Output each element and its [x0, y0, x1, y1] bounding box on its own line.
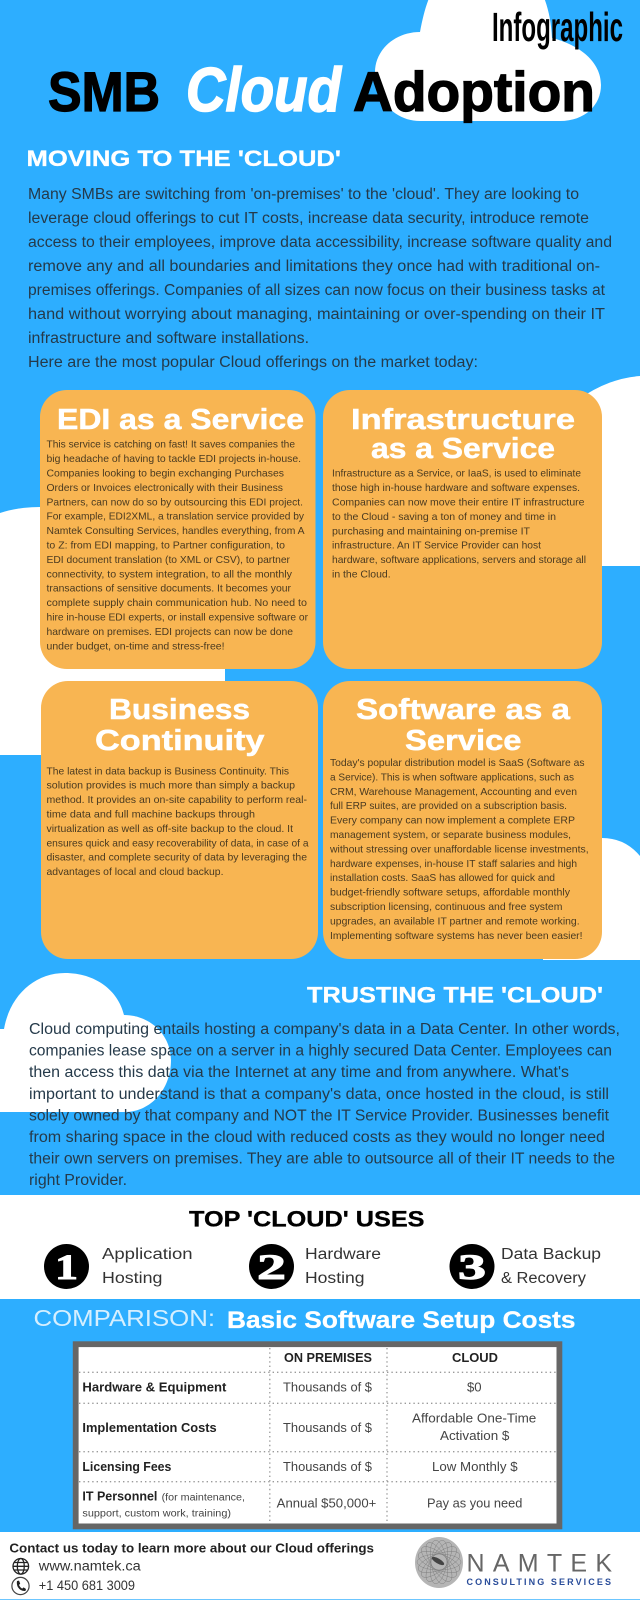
card body: Software as a Service: without stressing over unaffordable license investments, — [329, 844, 589, 855]
row: IT personnel: Pay as you need — [427, 1495, 522, 1510]
table header row: CLOUD — [452, 1350, 498, 1365]
card body: Infrastructure: to the Cloud - saving a ton of money and time in — [332, 512, 556, 523]
title: Cloud — [186, 56, 342, 125]
trust text block: their own servers on premises. They are able to outsource all of their IT needs to the — [29, 1151, 615, 1168]
row: hardware and equipment: Thousands of $ — [283, 1380, 373, 1395]
card body: EDI: For example, EDI2XML, a translation service provided by — [46, 512, 305, 523]
row: implementation costs: Activation $ — [440, 1428, 510, 1443]
card body: Business Continuity: solution provides is much more than simply a backup — [46, 781, 295, 792]
title — [48, 56, 595, 125]
phone number: +1 450 681 3009 — [39, 1578, 135, 1593]
trust text block: solely owned by that company and NOT the IT Service Provider. Businesses benefit — [29, 1107, 610, 1124]
card body: Business Continuity: time data and full machine backups through — [46, 810, 255, 820]
card body: Software as a Service: subscription licensing, continuous and free system — [330, 902, 562, 913]
card body: EDI — [46, 440, 309, 652]
row: hardware and equipment: $0 — [467, 1380, 482, 1395]
logo spiral mark — [415, 1537, 463, 1588]
card body: Software as a Service: hardware expenses, in-house IT staff salaries and high — [330, 859, 577, 870]
logo wordmark: NAMTEK — [466, 1550, 612, 1578]
card heading: Software as a Service: Software as a — [356, 694, 571, 726]
card body: EDI: connectivity, to system integration, to all the monthly — [46, 569, 293, 580]
panel: Business Continuity — [41, 681, 318, 959]
card body: Business Continuity — [46, 766, 309, 878]
trust text block: right Provider. — [29, 1172, 127, 1189]
card heading: EDI: EDI as a Service — [57, 404, 304, 436]
card body: Software as a Service: Every company can now implement a complete ERP — [330, 816, 575, 827]
row: IT personnel: (for maintenance, — [162, 1493, 245, 1504]
card body: Business Continuity: virtualization as well as off-site backup to the cloud. It — [46, 824, 293, 835]
row: implementation costs — [82, 1411, 536, 1443]
cloud: left lower — [0, 973, 171, 1112]
card heading: Software as a Service — [356, 694, 571, 757]
trust text block: companies lease space on a server in a highly secured Data Center. Employees can — [29, 1043, 612, 1060]
table header row — [284, 1350, 498, 1365]
use 2: hardware hosting: Hosting — [305, 1270, 364, 1287]
icon: globe — [13, 1558, 29, 1574]
row: licensing fees: Thousands of $ — [283, 1459, 373, 1474]
card body: Business Continuity: advantages of local and cloud backup. — [46, 867, 224, 878]
card body: Software as a Service — [329, 758, 589, 942]
card body: EDI: Orders or Invoices electronically with their Business — [46, 483, 283, 494]
card body: Software as a Service: Today's popular distribution model is SaaS (Software as — [330, 758, 584, 769]
icon: phone — [12, 1577, 29, 1595]
use 2: hardware hosting — [249, 1244, 381, 1289]
row: IT personnel: IT Personnel — [82, 1489, 157, 1504]
use 3: data backup and recovery: Data Backup — [501, 1246, 601, 1263]
intro text block: premises offerings. Companies of all sizes can now focus on their business tasks at — [28, 282, 606, 299]
card heading: Business Continuity: Continuity — [95, 725, 264, 757]
use 1: application hosting: Hosting — [102, 1270, 162, 1287]
card body: Software as a Service: Implementing software systems has never been easier! — [330, 931, 582, 942]
card body: Infrastructure: Companies can now move their entire IT infrastructure — [332, 498, 585, 508]
card body: Infrastructure — [332, 469, 586, 580]
use 3: data backup and recovery: 3 — [458, 1247, 486, 1287]
title: SMB — [48, 60, 160, 123]
card body: Business Continuity: method. It provides an on-site capability to perform real- — [46, 795, 307, 806]
card body: Software as a Service: installation costs. SaaS has allowed for quick and — [330, 873, 555, 884]
card body: EDI: Namtek Consulting Services, handles everything, from A — [46, 526, 305, 537]
row: licensing fees — [82, 1459, 518, 1474]
intro text block: Many SMBs are switching from 'on-premises' to the 'cloud'. They are looking to — [28, 186, 579, 203]
card body: Software as a Service: full ERP suites, are provided on a subscription basis. — [330, 801, 567, 812]
cloud: right lower — [543, 838, 640, 960]
card body: EDI: This service is catching on fast! It saves companies the — [46, 440, 295, 451]
card body: EDI: hardware on premises. EDI projects can now be done — [46, 627, 293, 638]
card body: Business Continuity: disaster, and complete security of data by leveraging the — [46, 853, 307, 864]
card body: EDI: complete supply chain communication hub. No need to — [46, 598, 307, 609]
card body: Business Continuity: ensures quick and easy recoverability of data, in case of a — [46, 838, 309, 849]
card body: Software as a Service: CRM, Warehouse Management, Accounting and even — [330, 787, 577, 798]
panel: Infrastructure as a Service — [323, 390, 602, 669]
trust text block — [29, 1021, 620, 1189]
contact heading: Contact us today to learn more about our Cloud offerings — [9, 1542, 374, 1556]
card body: Software as a Service: management system, or separate business modules, — [330, 830, 571, 841]
intro text block: Here are the most popular Cloud offerings on the market today: — [28, 354, 478, 371]
card body: Infrastructure: those high in-house hardware and software expenses. — [332, 483, 580, 494]
intro text block: remove any and all boundaries and limitations they once had with traditional on- — [28, 258, 600, 275]
use 2: hardware hosting: 2 — [257, 1247, 286, 1287]
card body: EDI: Partners, can now do so by outsourcing this EDI project. — [46, 497, 303, 508]
use 3: data backup and recovery: & Recovery — [501, 1270, 586, 1287]
panel: Software as a Service — [323, 681, 602, 959]
logo: Namtek — [415, 1537, 612, 1588]
card body: EDI: transactions of sensitive documents. It becomes your — [46, 584, 292, 595]
comparison table — [76, 1344, 559, 1526]
card body: Infrastructure: infrastructure. An IT Service Provider can host — [332, 541, 541, 552]
card heading: Business Continuity: Business — [109, 694, 250, 726]
intro text block: hand without worrying about managing, maintaining or over-spending on their IT — [28, 306, 606, 323]
row: hardware and equipment: Hardware & Equipment — [82, 1380, 227, 1395]
trust text block: Cloud computing entails hosting a company's data in a Data Center. In other words, — [29, 1021, 620, 1038]
card body: Software as a Service: budget-friendly software setups, affordable monthly — [330, 888, 571, 899]
heading: comparison: Basic Software Setup Costs — [227, 1307, 576, 1334]
card body: EDI: to Z: from EDI mapping, to Partner configuration, to — [46, 540, 285, 552]
intro text block: access to their employees, improve data accessibility, increase software quality and — [28, 234, 612, 251]
card body: Software as a Service: upgrades, an available IT partner and remote working. — [330, 916, 580, 927]
card heading: Infrastructure: Infrastructure — [351, 404, 575, 436]
card body: Infrastructure: Infrastructure as a Service, or IaaS, is used to eliminate — [332, 469, 581, 480]
intro text block: infrastructure and software installations. — [28, 330, 309, 347]
row: implementation costs: Implementation Costs — [82, 1420, 217, 1435]
heading: top cloud uses: TOP 'CLOUD' USES — [189, 1207, 424, 1232]
heading: trusting the cloud: TRUSTING THE 'CLOUD' — [307, 983, 603, 1008]
panel: EDI as a Service — [40, 390, 316, 669]
panel: footer contact — [0, 1532, 640, 1599]
card heading: Software as a Service: Service — [405, 725, 522, 757]
title: Adoption — [353, 60, 595, 123]
intro text block — [28, 186, 612, 371]
row: IT personnel: support, custom work, training) — [82, 1508, 231, 1519]
logo tagline: CONSULTING SERVICES — [466, 1577, 611, 1587]
cloud: right middle — [585, 376, 640, 566]
use 1: application hosting: 1 — [55, 1247, 78, 1287]
cloud: top right — [375, 0, 601, 121]
row: implementation costs: Affordable One-Time — [412, 1411, 536, 1426]
intro text block: leverage cloud offerings to cut IT costs, increase data security, introduce remote — [28, 210, 589, 227]
card body: EDI: Companies looking to begin exchanging Purchases — [46, 468, 284, 480]
row: IT personnel: Annual $50,000+ — [277, 1495, 376, 1510]
use 3: data backup and recovery — [450, 1244, 601, 1289]
trust text block: from sharing space in the cloud with reduced costs as they would no longer need — [29, 1129, 605, 1146]
row: hardware and equipment — [82, 1380, 482, 1395]
card heading: Infrastructure: as a Service — [371, 433, 555, 465]
trust text block: important to understand is that a company's data, once hosted in the cloud, is still — [29, 1086, 609, 1103]
heading: comparison — [34, 1305, 576, 1334]
card heading: Infrastructure — [351, 404, 575, 465]
trust text block: then access this data via the Internet at any time and from anywhere. What's — [29, 1064, 569, 1081]
card body: EDI: under budget, on-time and stress-free! — [46, 641, 224, 652]
row: IT personnel — [82, 1489, 522, 1519]
table header row: ON PREMISES — [284, 1350, 372, 1365]
heading: moving to the cloud: MOVING TO THE 'CLOUD' — [26, 146, 341, 171]
use 1: application hosting — [44, 1244, 193, 1289]
card body: Infrastructure: purchasing and maintaining on-premise IT — [332, 526, 531, 537]
heading: comparison: COMPARISON: — [34, 1305, 215, 1331]
cloud: left large — [0, 507, 225, 755]
panel: top cloud uses — [0, 1195, 640, 1299]
card body: EDI: hire in-house EDI experts, or install expensive software or — [46, 612, 309, 624]
website: www.namtek.ca — [38, 1559, 141, 1574]
card body: EDI: EDI document translation (to XML or CSV), to partner — [46, 555, 291, 566]
row: licensing fees: Low Monthly $ — [432, 1459, 518, 1474]
use 2: hardware hosting: Hardware — [305, 1246, 381, 1263]
card heading: Business Continuity — [95, 694, 264, 757]
card body: Business Continuity: The latest in data backup is Business Continuity. This — [46, 766, 289, 777]
card body: EDI: big headache of having to tackle EDI projects in-house. — [46, 454, 301, 465]
row: licensing fees: Licensing Fees — [82, 1459, 171, 1474]
card body: Infrastructure: in the Cloud. — [332, 570, 391, 580]
use 1: application hosting: Application — [102, 1246, 193, 1263]
row: implementation costs: Thousands of $ — [283, 1420, 373, 1435]
card body: Infrastructure: hardware, software applications, servers and storage all — [332, 555, 586, 566]
card body: Software as a Service: a Service). This is when software applications, such as — [330, 772, 574, 783]
